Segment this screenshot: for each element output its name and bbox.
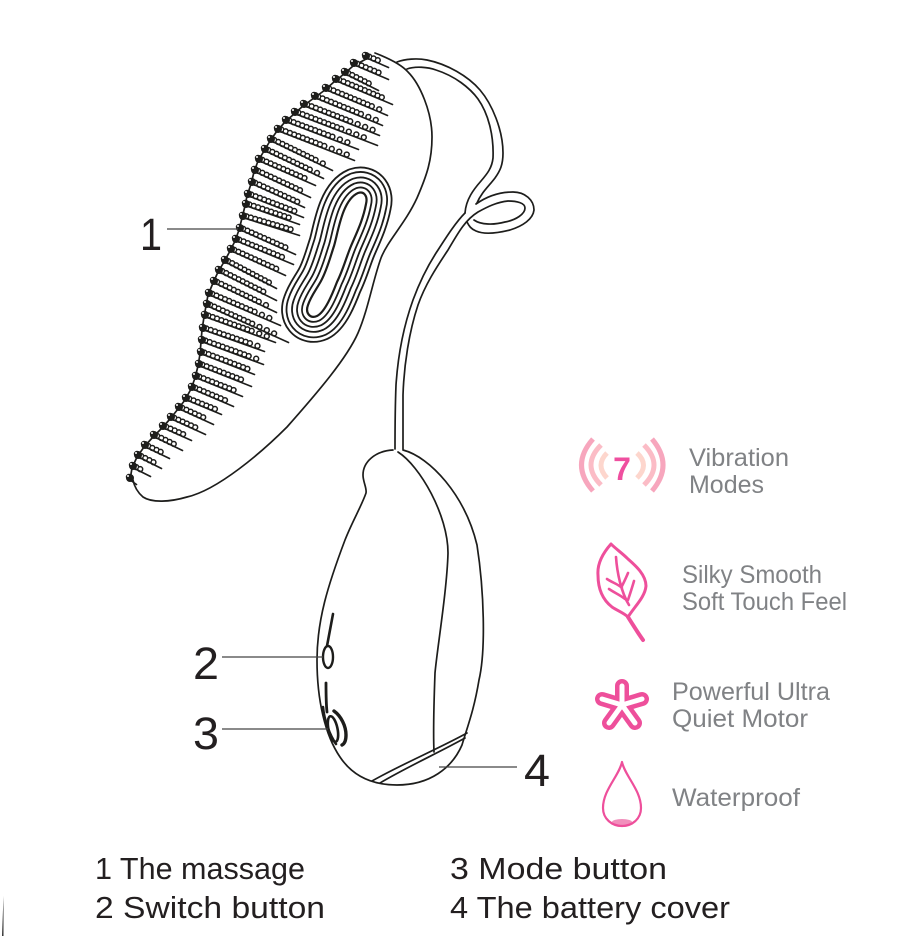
egg outline — [317, 450, 483, 785]
legend: parts list: 4 The battery cover — [450, 890, 730, 925]
feature: quiet motor — [602, 678, 830, 733]
charging cord with loop — [395, 59, 534, 449]
callout 4: battery cover: 4 — [524, 745, 550, 796]
label: silky smooth soft touch feel: Soft Touch Feel — [682, 588, 847, 616]
egg side seam — [398, 452, 448, 752]
legend: parts list — [95, 851, 730, 925]
bristle rows — [128, 54, 392, 484]
concentric contour button — [307, 193, 367, 317]
icon: motor star — [602, 686, 642, 723]
callout 4: battery cover — [439, 745, 550, 796]
massage head outline — [133, 53, 432, 501]
battery cover seam — [372, 733, 467, 783]
icon: seven vibration waves: 7 — [613, 451, 631, 487]
mode button — [323, 683, 346, 745]
legend: parts list: 1 The massage — [95, 851, 305, 886]
label: vibration modes — [689, 444, 789, 499]
label: waterproof: Waterproof — [672, 784, 800, 812]
callout 1: massage — [140, 209, 238, 260]
label: powerful ultra quiet motor — [672, 678, 830, 733]
label: powerful ultra quiet motor: Quiet Motor — [672, 705, 808, 733]
callout 2: switch button: 2 — [193, 638, 219, 689]
callout 2: switch button — [193, 638, 323, 689]
callout 1: massage: 1 — [140, 209, 162, 260]
feature: vibration modes — [582, 439, 789, 499]
label: powerful ultra quiet motor: Powerful Ultra — [672, 678, 830, 706]
bristle base edge — [130, 58, 368, 480]
label: vibration modes: Vibration — [689, 444, 789, 472]
label: silky smooth soft touch feel — [682, 561, 847, 616]
icon: water drop — [603, 762, 641, 826]
device: egg remote — [317, 450, 483, 785]
legend: parts list: 3 Mode button — [450, 851, 667, 886]
switch button — [323, 614, 333, 668]
callout 3: mode button — [193, 708, 328, 759]
label: silky smooth soft touch feel: Silky Smooth — [682, 561, 822, 589]
feature: silky smooth — [598, 544, 847, 640]
icon: leaf — [598, 544, 646, 640]
label: vibration modes: Modes — [689, 471, 764, 499]
device: massage head — [128, 53, 432, 501]
callout 3: mode button: 3 — [193, 708, 219, 759]
icon: seven vibration waves — [582, 439, 663, 491]
feature: waterproof — [603, 762, 800, 826]
legend: parts list: 2 Switch button — [95, 890, 325, 925]
